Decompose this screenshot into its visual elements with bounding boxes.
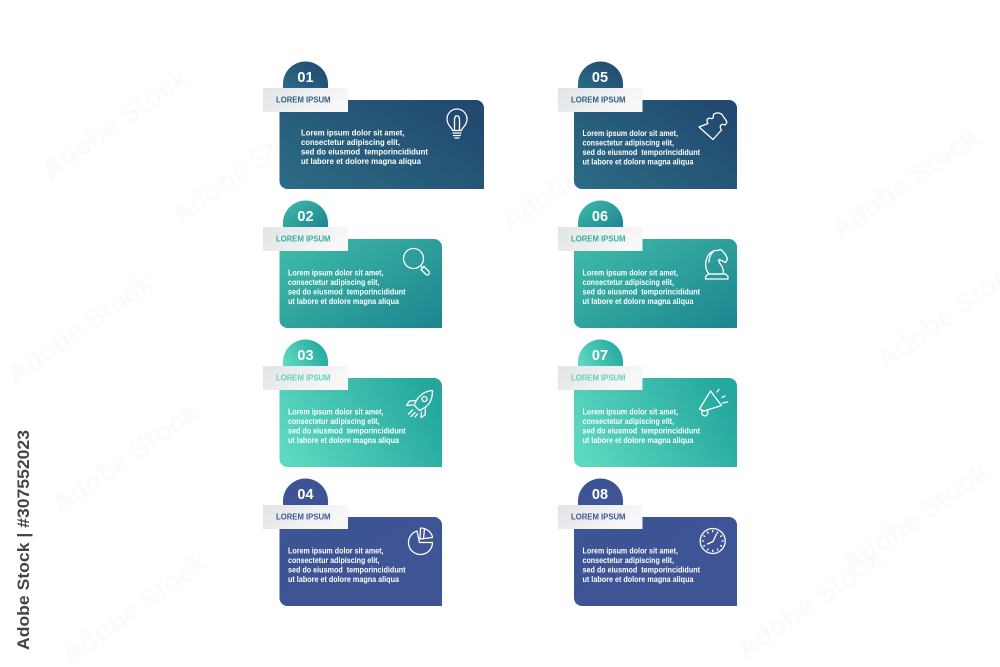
background watermark: Adobe Stock [56, 546, 214, 667]
body text 06: consectetur adipiscing elit, [582, 277, 674, 287]
body text 01 [301, 128, 428, 166]
body text 05 [582, 128, 700, 166]
background watermark: Adobe Stock [826, 121, 984, 245]
body text 07: Lorem ipsum dolor sit amet, [582, 406, 678, 416]
body text 02: ut labore et dolore magna aliqua [288, 296, 399, 306]
body text 03: sed do eiusmod temporincididunt [288, 426, 406, 436]
body text 02: consectetur adipiscing elit, [288, 277, 380, 287]
background watermark: Adobe Stock [46, 396, 204, 520]
badge 03 [283, 340, 328, 366]
icon: magnifier [404, 248, 429, 275]
label 03: LOREM IPSUM [276, 372, 330, 382]
panel: step 07 [558, 340, 737, 467]
badge 05 [578, 62, 623, 88]
label 04: LOREM IPSUM [276, 512, 330, 522]
icon: puzzle piece [699, 113, 727, 140]
badge 02: 02 [297, 209, 314, 225]
body text 07: consectetur adipiscing elit, [582, 416, 674, 426]
badge 07: 07 [592, 348, 608, 364]
body text 04: Lorem ipsum dolor sit amet, [288, 546, 384, 556]
label 03 [263, 366, 348, 390]
body text 06 [582, 268, 700, 306]
body text 04: consectetur adipiscing elit, [288, 555, 380, 565]
body text 07: sed do eiusmod temporincididunt [582, 426, 700, 436]
badge 01 [283, 62, 328, 88]
badge 01: 01 [297, 70, 314, 86]
badge 06 [578, 200, 623, 228]
stock id caption: Adobe Stock | #307552023 [14, 430, 33, 650]
body text 05: consectetur adipiscing elit, [582, 138, 674, 148]
icon: pie chart [409, 528, 432, 554]
body text 08: consectetur adipiscing elit, [582, 555, 674, 565]
body text 04: sed do eiusmod temporincididunt [288, 564, 406, 574]
body text 04: ut labore et dolore magna aliqua [288, 574, 399, 584]
label 04 [263, 505, 348, 529]
label 08: LOREM IPSUM [571, 512, 626, 522]
badge 08: 08 [592, 487, 608, 503]
body text 01: ut labore et dolore magna aliqua [301, 156, 421, 166]
body text 07 [582, 406, 700, 445]
label 07: LOREM IPSUM [571, 372, 626, 382]
background watermark: Adobe Stock [166, 106, 324, 230]
card 03 [280, 378, 442, 467]
background watermark: Adobe Stock [731, 541, 889, 665]
label 02: LOREM IPSUM [276, 234, 330, 244]
body text 01: consectetur adipiscing elit, [301, 137, 400, 147]
label 07 [558, 366, 642, 390]
body text 05: ut labore et dolore magna aliqua [582, 156, 694, 166]
body text 06: ut labore et dolore magna aliqua [582, 296, 694, 306]
badge 04 [283, 478, 328, 506]
label 06: LOREM IPSUM [571, 234, 626, 244]
label 05 [558, 88, 642, 112]
badge 06: 06 [592, 209, 608, 225]
background watermark: Adobe Stock [496, 113, 654, 237]
label 01: LOREM IPSUM [276, 94, 330, 104]
panel: step 02 [263, 200, 442, 328]
panel: step 05 [558, 62, 737, 189]
card 04 [280, 517, 442, 606]
background watermark: Adobe Stock [36, 61, 194, 185]
card 05 [574, 100, 737, 189]
panel: step 04 [263, 478, 442, 606]
icon: chess knight [706, 250, 728, 279]
body text 05: Lorem ipsum dolor sit amet, [582, 128, 678, 138]
body text 03: ut labore et dolore magna aliqua [288, 435, 399, 445]
body text 01: sed do eiusmod temporincididunt [301, 146, 428, 156]
label 08 [558, 505, 642, 529]
body text 02: Lorem ipsum dolor sit amet, [288, 268, 384, 278]
background watermark: Adobe Stock [1, 266, 159, 390]
body text 04 [288, 546, 406, 584]
card 07 [574, 378, 737, 467]
badge 03: 03 [297, 348, 314, 364]
panel: step 01 [263, 62, 484, 189]
body text 08: ut labore et dolore magna aliqua [582, 574, 694, 584]
body text 06: Lorem ipsum dolor sit amet, [582, 268, 678, 278]
body text 02 [288, 268, 406, 306]
label 02 [263, 227, 348, 251]
body text 05: sed do eiusmod temporincididunt [582, 147, 700, 157]
badge 05: 05 [592, 70, 608, 86]
card 02 [280, 239, 442, 328]
panel: step 03 [263, 340, 442, 467]
label 01 [263, 88, 348, 112]
panel: step 08 [558, 478, 737, 606]
badge 07 [578, 340, 623, 366]
icon: clock [700, 528, 725, 554]
card 08 [574, 517, 737, 606]
body text 03: Lorem ipsum dolor sit amet, [288, 406, 384, 416]
icon: megaphone [700, 390, 728, 416]
label 05: LOREM IPSUM [571, 94, 626, 104]
icon: rocket [406, 390, 432, 418]
body text 08 [582, 546, 700, 584]
badge 04: 04 [297, 487, 314, 503]
body text 02: sed do eiusmod temporincididunt [288, 286, 406, 296]
body text 03: consectetur adipiscing elit, [288, 416, 380, 426]
badge 02 [283, 200, 328, 228]
background watermark: Adobe Stock [836, 456, 994, 580]
body text 01: Lorem ipsum dolor sit amet, [301, 128, 404, 138]
body text 07: ut labore et dolore magna aliqua [582, 435, 694, 445]
body text 08: sed do eiusmod temporincididunt [582, 564, 700, 574]
card 06 [574, 239, 737, 328]
body text 06: sed do eiusmod temporincididunt [582, 286, 700, 296]
badge 08 [578, 478, 623, 506]
card 01 [280, 100, 484, 189]
label 06 [558, 227, 642, 251]
panel: step 06 [558, 200, 737, 328]
body text 08: Lorem ipsum dolor sit amet, [582, 546, 678, 556]
body text 03 [288, 406, 406, 445]
icon: light bulb [447, 109, 467, 138]
